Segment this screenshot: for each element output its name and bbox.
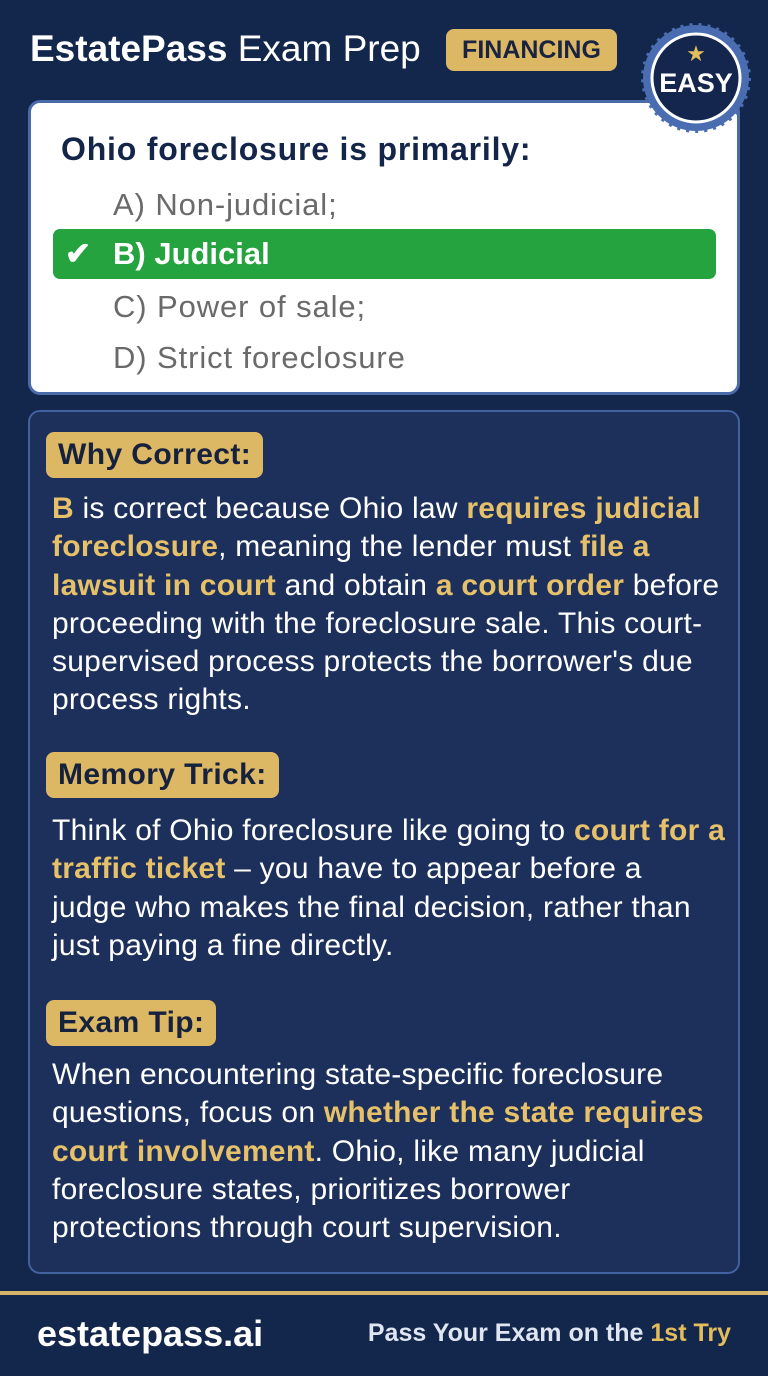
exam tip label: Exam Tip: (58, 1006, 204, 1039)
exam tip text (52, 1058, 704, 1244)
category badge (446, 29, 617, 71)
option C: C) Power of sale; (113, 289, 366, 324)
why correct label: Why Correct: (58, 438, 251, 471)
why correct text: foreclosure, meaning the lender must file a (52, 530, 650, 563)
option B correct (53, 229, 716, 279)
option A: A) Non-judicial; (113, 187, 338, 222)
memory trick label: Memory Trick: (58, 758, 267, 791)
difficulty seal (641, 23, 751, 133)
exam tip text: foreclosure states, prioritizes borrower (52, 1173, 571, 1206)
header title: EstatePass Exam Prep (30, 28, 421, 69)
difficulty seal: EASY (659, 68, 733, 98)
memory trick text (51, 814, 725, 962)
exam tip text: protections through court supervision. (52, 1211, 562, 1244)
option B correct: B) Judicial (113, 236, 270, 271)
exam tip text: questions, focus on whether the state requires (52, 1096, 704, 1129)
memory trick text: Think of Ohio foreclosure like going to court for a (52, 814, 725, 847)
why correct label (46, 432, 263, 478)
exam tip label (46, 1000, 216, 1046)
memory trick label (46, 752, 279, 798)
why correct text (52, 492, 719, 716)
difficulty seal: ★ (686, 41, 706, 66)
explanation panel (28, 410, 740, 1274)
why correct text: B is correct because Ohio law requires judicial (52, 492, 701, 525)
footer brand: estatepass.ai (37, 1313, 263, 1354)
footer tagline: Pass Your Exam on the 1st Try (368, 1319, 731, 1347)
why correct text: lawsuit in court and obtain a court order before (52, 569, 719, 602)
memory trick text: just paying a fine directly. (52, 929, 394, 962)
exam tip text: court involvement. Ohio, like many judicial (52, 1135, 645, 1168)
question card (28, 100, 740, 395)
option D: D) Strict foreclosure (113, 340, 406, 375)
exam tip text: When encountering state-specific foreclosure (52, 1058, 663, 1091)
category badge: FINANCING (462, 36, 601, 64)
memory trick text: traffic ticket – you have to appear before a (52, 852, 642, 885)
question: Ohio foreclosure is primarily: (61, 131, 531, 167)
why correct text: supervised process protects the borrower's due (52, 645, 693, 678)
memory trick text: judge who makes the final decision, rather than (52, 891, 691, 924)
option B correct: ✔ (65, 236, 91, 271)
why correct text: process rights. (52, 683, 251, 716)
why correct text: proceeding with the foreclosure sale. This court- (52, 607, 702, 640)
